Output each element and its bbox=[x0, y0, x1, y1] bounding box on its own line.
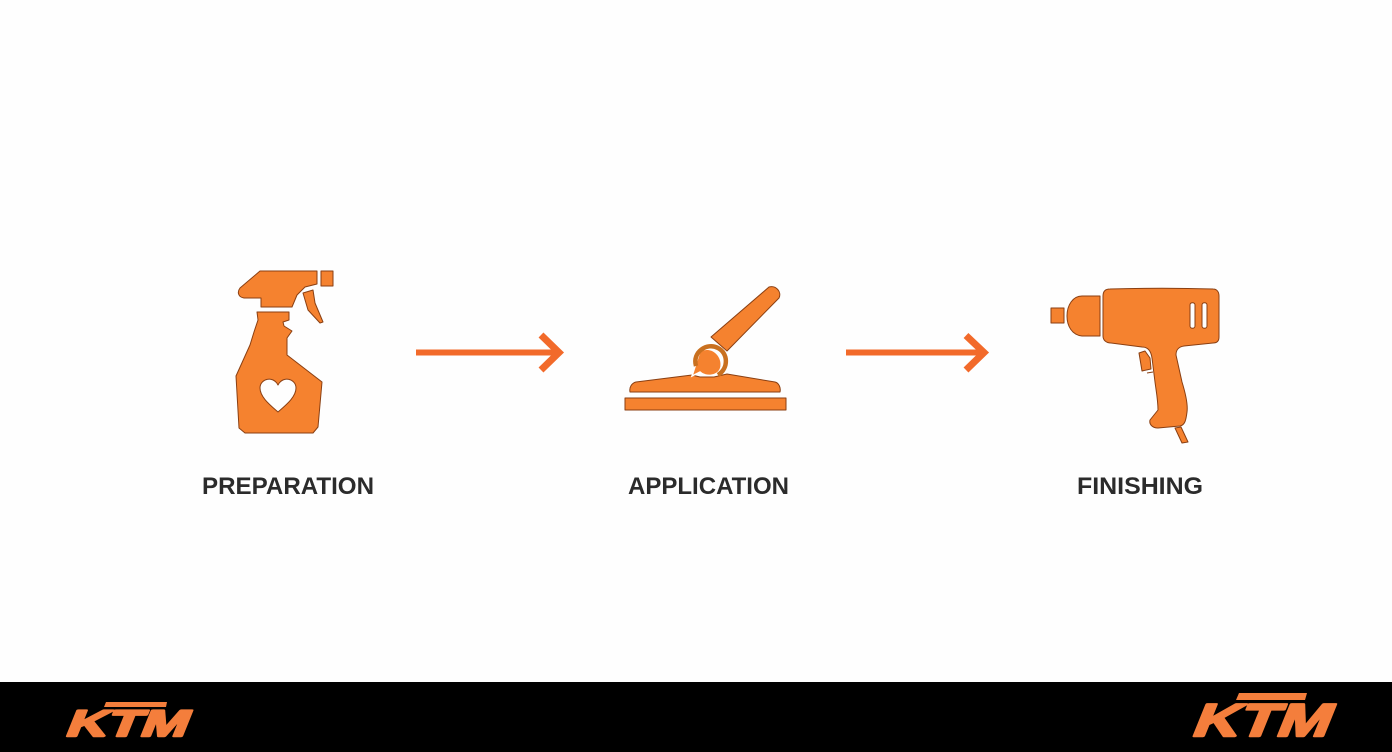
icon: power drill bbox=[1051, 288, 1219, 443]
label: application: APPLICATION bbox=[628, 473, 789, 500]
arrow: preparation to application bbox=[416, 335, 559, 370]
icon: spray bottle bbox=[236, 271, 333, 433]
label: finishing: FINISHING bbox=[1077, 473, 1203, 500]
arrow: application to finishing bbox=[846, 336, 984, 370]
logo: KTM left: KTM bbox=[61, 703, 198, 745]
footer bar bbox=[0, 682, 1392, 752]
label: preparation: PREPARATION bbox=[202, 473, 374, 500]
icon: squeegee tool bbox=[625, 287, 786, 410]
logo: KTM left bbox=[61, 702, 198, 745]
logo: KTM right: KTM bbox=[1186, 696, 1343, 747]
